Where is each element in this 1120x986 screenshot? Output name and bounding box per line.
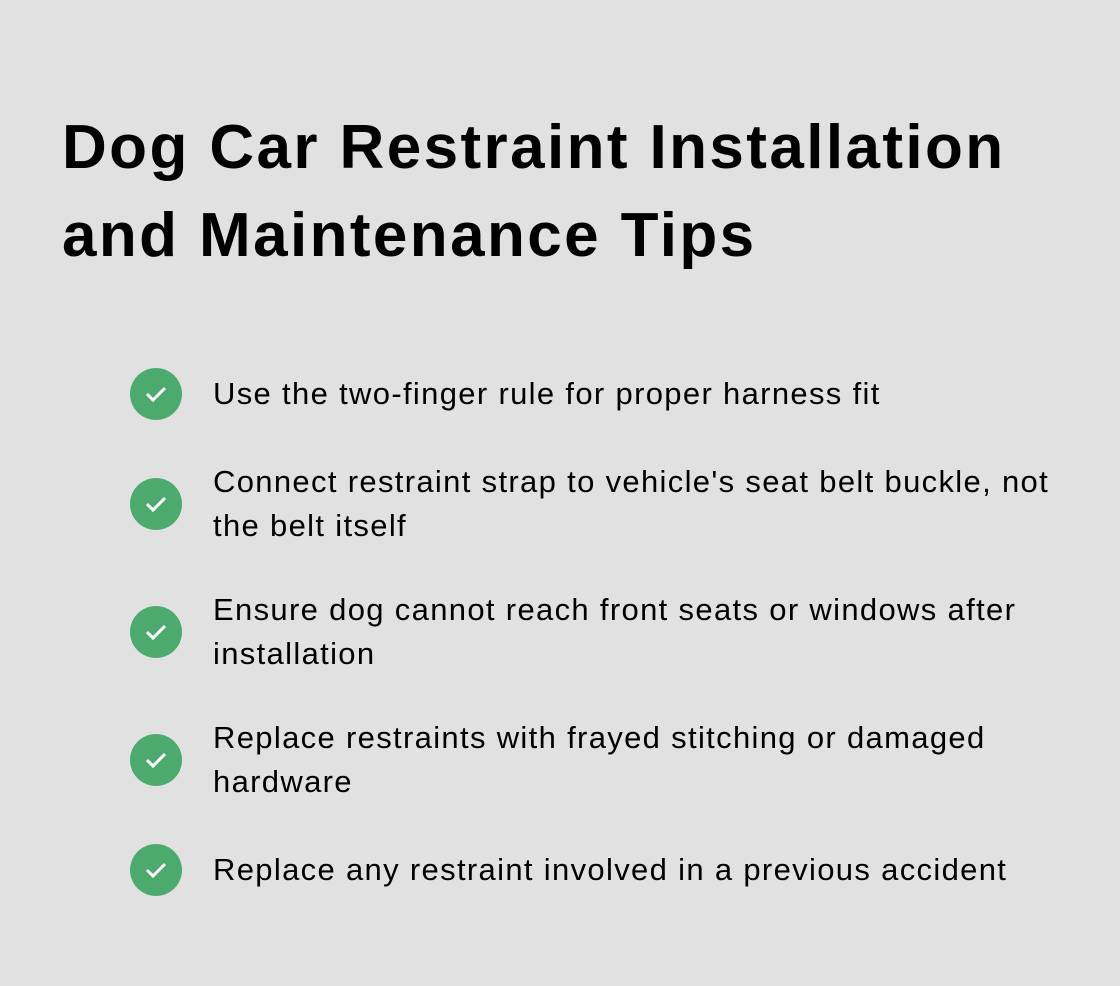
icon: check bbox=[130, 478, 182, 530]
item 1 bbox=[130, 368, 881, 420]
text 3: installation bbox=[213, 636, 375, 671]
text 2: the belt itself bbox=[213, 508, 407, 543]
title bbox=[62, 113, 1006, 270]
item 3 bbox=[130, 592, 1016, 671]
text 3: Ensure dog cannot reach front seats or windows after bbox=[213, 592, 1016, 627]
text 4 bbox=[213, 720, 986, 799]
icon: check bbox=[130, 368, 182, 420]
text 2: Connect restraint strap to vehicle's seat belt buckle, not bbox=[213, 464, 1049, 499]
text 4: Replace restraints with frayed stitching or damaged bbox=[213, 720, 986, 755]
icon: check bbox=[130, 606, 182, 658]
icon: check bbox=[130, 734, 182, 786]
title: Dog Car Restraint Installation bbox=[62, 113, 1006, 182]
text 5: Replace any restraint involved in a previous accident bbox=[213, 852, 1007, 887]
text 1: Use the two-finger rule for proper harness fit bbox=[213, 376, 881, 411]
title: and Maintenance Tips bbox=[62, 201, 757, 270]
item 2 bbox=[130, 464, 1049, 543]
text 2 bbox=[213, 464, 1049, 543]
item 5 bbox=[130, 844, 1007, 896]
icon: check bbox=[130, 844, 182, 896]
text 4: hardware bbox=[213, 764, 353, 799]
text 3 bbox=[213, 592, 1016, 671]
item 4 bbox=[130, 720, 986, 799]
